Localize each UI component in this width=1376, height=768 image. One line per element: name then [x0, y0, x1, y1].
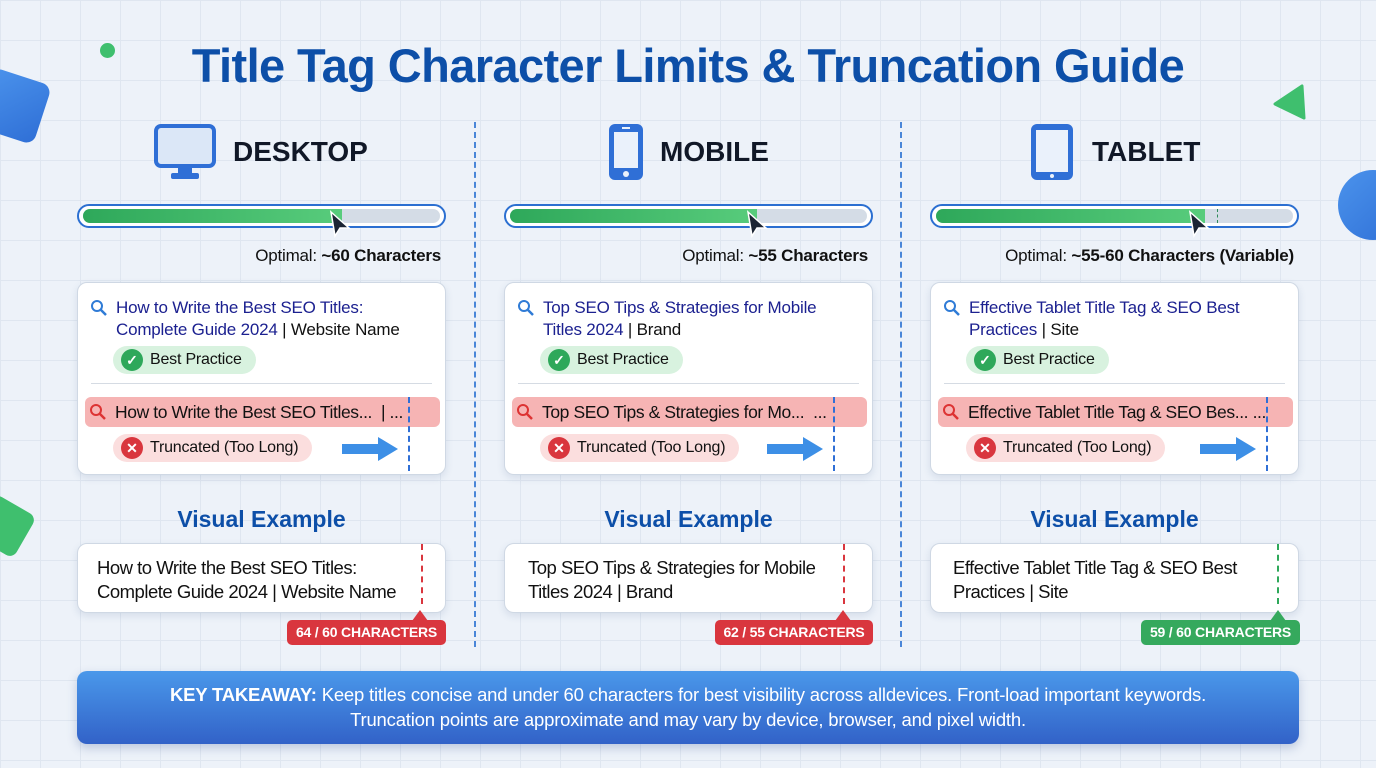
heading: desktop: DESKTOP: [233, 136, 368, 167]
search card: Top SEO Tips & Strategies for Mobile: [543, 298, 816, 317]
heading: mobile: [609, 124, 769, 180]
search card: ✓: [979, 352, 991, 368]
badge: char count: [1141, 620, 1300, 645]
panel: mobile: [502, 124, 875, 645]
decoration: green shape: [0, 493, 37, 559]
progress bar: [504, 204, 873, 228]
example box: [930, 543, 1299, 613]
heading: tablet: TABLET: [1092, 136, 1200, 167]
example box: Effective Tablet Title Tag & SEO Best: [953, 557, 1237, 578]
callout: key takeaway: Truncation points are approximate and may vary by device, browser, and pixel width.: [350, 709, 1026, 730]
decoration: blue circle: [1338, 170, 1376, 240]
badge: char count: 62 / 55 CHARACTERS: [723, 624, 865, 640]
heading: visual example: Visual Example: [1030, 506, 1199, 532]
heading: mobile: MOBILE: [660, 136, 769, 167]
example box: [504, 543, 873, 613]
panel: desktop: [75, 124, 448, 645]
search card: How to Write the Best SEO Titles... | ...: [115, 402, 403, 422]
example box: Titles 2024 | Brand: [528, 581, 673, 602]
search card: Truncated (Too Long): [150, 439, 298, 456]
heading: visual example: Visual Example: [177, 506, 346, 532]
search card: Effective Tablet Title Tag & SEO Bes... ...: [968, 402, 1266, 422]
search card: Best Practice: [150, 351, 242, 368]
search card: ✓: [126, 352, 138, 368]
search card: Complete Guide 2024 | Website Name: [116, 320, 400, 339]
example box: Complete Guide 2024 | Website Name: [97, 581, 396, 602]
title: Title Tag Character Limits & Truncation Guide: [192, 39, 1184, 92]
search card: Effective Tablet Title Tag & SEO Best: [969, 298, 1239, 317]
progress bar: [77, 204, 446, 228]
search card: [504, 282, 873, 475]
optimal label: Optimal: ~55-60 Characters (Variable): [1005, 246, 1294, 265]
search card: [930, 282, 1299, 475]
search card: ✕: [553, 440, 565, 456]
optimal label: Optimal: ~55 Characters: [682, 246, 868, 265]
search card: ✓: [553, 352, 565, 368]
example box: Top SEO Tips & Strategies for Mobile: [528, 557, 815, 578]
search card: Titles 2024 | Brand: [543, 320, 681, 339]
badge: char count: 59 / 60 CHARACTERS: [1150, 624, 1291, 640]
search card: Truncated (Too Long): [1003, 439, 1151, 456]
search card: Top SEO Tips & Strategies for Mo... ...: [542, 402, 827, 422]
heading: desktop: [154, 124, 368, 179]
search card: [77, 282, 446, 475]
search card: Practices | Site: [969, 320, 1079, 339]
search card: ✕: [126, 440, 138, 456]
search card: Best Practice: [1003, 351, 1095, 368]
badge: char count: [287, 620, 446, 645]
callout: key takeaway: [77, 671, 1299, 744]
decoration: blue square: [0, 67, 52, 145]
search card: Truncated (Too Long): [577, 439, 725, 456]
decoration: green triangle: [1273, 84, 1306, 120]
decoration: green dot: [100, 43, 115, 58]
divider lines: [474, 122, 476, 647]
panel: tablet: [928, 124, 1301, 645]
search card: Best Practice: [577, 351, 669, 368]
example box: [77, 543, 446, 613]
progress bar: [930, 204, 1299, 228]
search card: How to Write the Best SEO Titles:: [116, 298, 363, 317]
optimal label: Optimal: ~60 Characters: [255, 246, 441, 265]
badge: char count: 64 / 60 CHARACTERS: [296, 624, 437, 640]
example box: Practices | Site: [953, 581, 1068, 602]
example box: How to Write the Best SEO Titles:: [97, 557, 357, 578]
callout: key takeaway: KEY TAKEAWAY: Keep titles concise and under 60 characters for best visibility across alldevices. Front-load important keywords.: [170, 684, 1206, 705]
heading: tablet: [1031, 124, 1200, 180]
search card: ✕: [979, 440, 991, 456]
badge: char count: [715, 620, 873, 645]
heading: visual example: Visual Example: [604, 506, 773, 532]
